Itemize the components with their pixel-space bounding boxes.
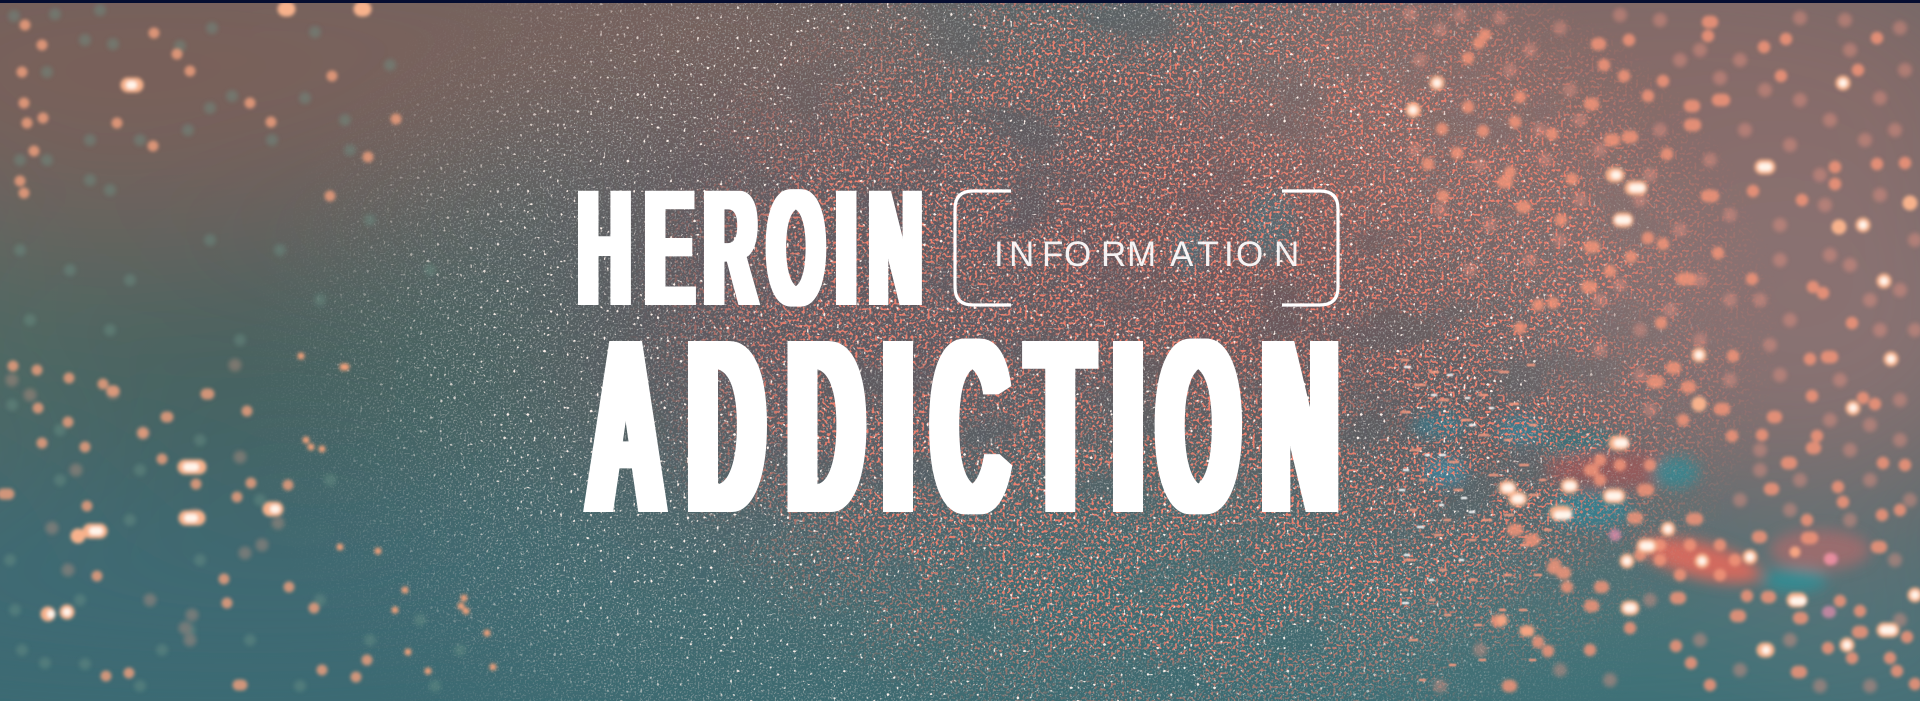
white glitter bbox=[304, 3, 1714, 701]
bracket frame around INFORMATION bbox=[955, 191, 1338, 305]
title line: HEROIN: HEROIN bbox=[578, 156, 922, 341]
salmon dots, left bbox=[3, 25, 493, 685]
salmon glitter bbox=[631, 3, 1765, 701]
colour patches lower right bbox=[1174, 191, 1870, 592]
top edge strip bbox=[0, 0, 1920, 3]
short streak glitter at right edge of the field bbox=[1400, 360, 1551, 680]
title line: ADDICTION: ADDICTION bbox=[588, 288, 1338, 565]
left bracket bbox=[955, 191, 1011, 305]
label: INFORMATION: INFORMATION bbox=[994, 235, 1299, 274]
fine grain bbox=[280, 3, 1707, 701]
salmon out-of-focus dots, right bbox=[1414, 22, 1915, 686]
right bracket bbox=[1282, 191, 1338, 305]
